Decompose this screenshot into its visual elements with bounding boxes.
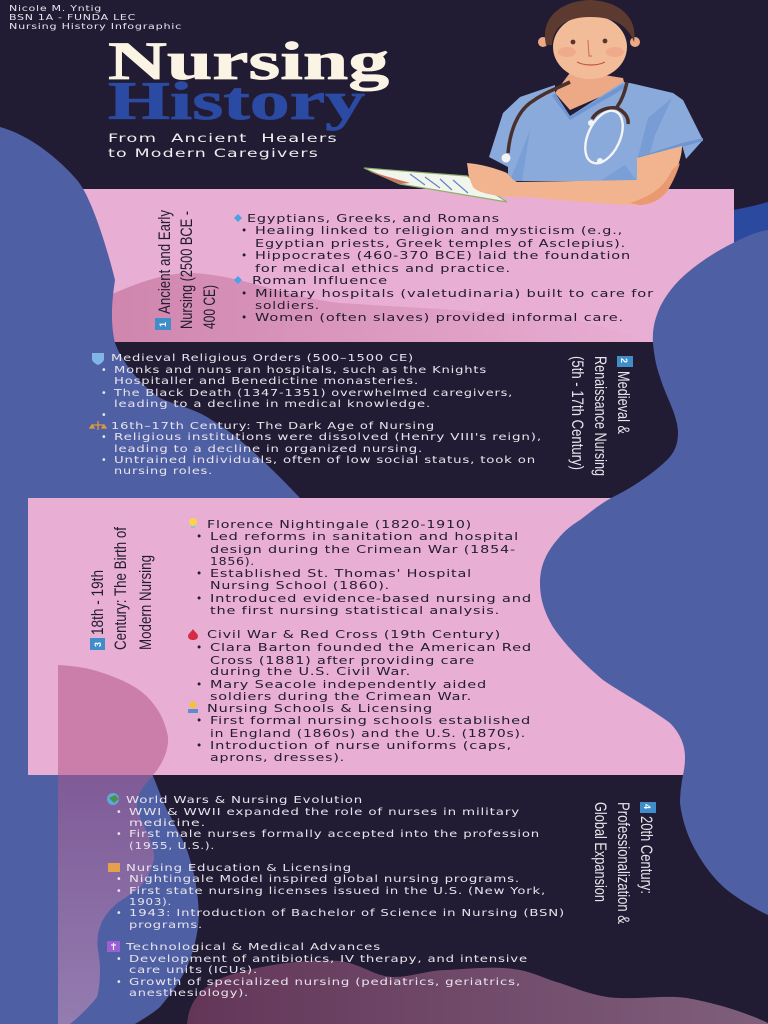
section 4 icons bbox=[107, 793, 120, 952]
section 2 text: Hospitaller and Benedictine monasteries. bbox=[114, 376, 419, 387]
section 3 text: Nursing School (1860). bbox=[210, 580, 390, 592]
bottom maroon wave bbox=[187, 960, 768, 1024]
author credits: Nursing History Infographic bbox=[9, 22, 182, 31]
section 2 heading: Medieval & bbox=[614, 371, 632, 434]
author credits bbox=[9, 4, 182, 31]
section 2 text: • bbox=[101, 410, 107, 421]
section 3 text: Introduction of nurse uniforms (caps, bbox=[210, 740, 512, 752]
section 3 heading bbox=[89, 527, 155, 650]
section 3 heading: 18th - 19th bbox=[89, 570, 107, 635]
section 2 text: 16th–17th Century: The Dark Age of Nursing bbox=[111, 421, 435, 432]
section 4 text: • bbox=[116, 908, 122, 919]
section 4 text: Technological & Medical Advances bbox=[125, 942, 381, 953]
section 1 text: Healing linked to religion and mysticism (e.g., bbox=[255, 225, 623, 237]
section 2 text: Monks and nuns ran hospitals, such as the Knights bbox=[114, 365, 487, 376]
section 1 text: for medical ethics and practice. bbox=[255, 263, 511, 275]
author credits: BSN 1A - FUNDA LEC bbox=[9, 13, 136, 22]
left blue blob bbox=[0, 127, 300, 1024]
section 3 text: Nursing Schools & Licensing bbox=[207, 703, 433, 715]
section 2 text: • bbox=[101, 388, 107, 399]
section 4 heading: Global Expansion bbox=[591, 802, 609, 902]
panel 1 darker wave bbox=[100, 273, 652, 342]
illustration: nurse with clipboard bbox=[364, 0, 703, 205]
pink panel 1 bbox=[70, 189, 734, 342]
section 4 text: • bbox=[116, 874, 122, 885]
section 4 text: Nightingale Model inspired global nursing programs. bbox=[129, 874, 520, 885]
section 1 text: • bbox=[241, 312, 248, 324]
section 3 text: • bbox=[196, 568, 203, 580]
section 3 text: Florence Nightingale (1820-1910) bbox=[207, 519, 472, 531]
title: History bbox=[108, 71, 365, 131]
section 4 text: anesthesiology). bbox=[129, 988, 249, 999]
section 1 text: Egyptian priests, Greek temples of Asclepius). bbox=[255, 238, 626, 250]
section 1 text: Military hospitals (valetudinaria) built to care for bbox=[255, 288, 654, 300]
section 2 heading: Renaissance Nursing bbox=[591, 356, 609, 476]
section 4 text: (1955, U.S.). bbox=[129, 841, 215, 852]
section 1 text: Women (often slaves) provided informal care. bbox=[255, 312, 624, 324]
section 4 text: programs. bbox=[129, 920, 203, 931]
section 1 text: • bbox=[241, 288, 248, 300]
section 4 heading: 4 bbox=[642, 804, 652, 809]
section 4 text: Growth of specialized nursing (pediatrics, geriatrics, bbox=[129, 977, 521, 988]
section 4 text: 1903). bbox=[129, 897, 172, 908]
section 4 text bbox=[116, 795, 565, 999]
section 4 text: care units (ICUs). bbox=[129, 965, 258, 976]
subtitle bbox=[108, 131, 338, 160]
section 3 text: • bbox=[196, 679, 203, 691]
right blue blob bbox=[540, 230, 768, 915]
section 3 text: aprons, dresses). bbox=[210, 752, 345, 764]
section 2 text: • bbox=[101, 365, 107, 376]
section 3: birth of modern nursing bbox=[89, 518, 532, 764]
section 3 text: the first nursing statistical analysis. bbox=[210, 605, 500, 617]
section 3 text: • bbox=[196, 593, 203, 605]
section 2 text: nursing roles. bbox=[114, 466, 213, 477]
section 3 text: • bbox=[196, 740, 203, 752]
section 2 text: leading to a decline in organized nursing. bbox=[114, 444, 423, 455]
pink panel 3 bbox=[28, 498, 685, 775]
section 1 heading: Nursing (2500 BCE - bbox=[178, 211, 196, 329]
purple blob lower left bbox=[58, 770, 154, 1024]
section 2 text: Religious institutions were dissolved (Henry VIII's reign), bbox=[114, 432, 542, 443]
section 1 heading: Ancient and Early bbox=[156, 209, 174, 314]
title bbox=[108, 31, 389, 131]
panel 3 darker circle bbox=[58, 665, 168, 775]
section 3 text: Clara Barton founded the American Red bbox=[210, 642, 532, 654]
section 4 text: 1943: Introduction of Bachelor of Science in Nursing (BSN) bbox=[129, 908, 565, 919]
section 3 heading: 3 bbox=[93, 642, 103, 647]
section 2 text: Untrained individuals, often of low social status, took on bbox=[114, 455, 536, 466]
section 4: professionalization bbox=[107, 793, 656, 999]
section 4 text: • bbox=[116, 977, 122, 988]
section 4 heading bbox=[591, 802, 656, 924]
section 3 text: design during the Crimean War (1854- bbox=[210, 544, 516, 556]
section 1 text: • bbox=[241, 225, 248, 237]
section 4 text: First state nursing licenses issued in the U.S. (New York, bbox=[129, 886, 546, 897]
section 1 heading: 1 bbox=[158, 322, 168, 327]
subtitle: to Modern Caregivers bbox=[108, 146, 319, 160]
section 3 text: Mary Seacole independently aided bbox=[210, 679, 487, 691]
section 3 text: Led reforms in sanitation and hospital bbox=[210, 531, 519, 543]
section 4 text: • bbox=[116, 886, 122, 897]
section 2 heading bbox=[568, 356, 633, 476]
section 4 text: First male nurses formally accepted into the profession bbox=[129, 829, 540, 840]
section 4 heading: 20th Century: bbox=[637, 816, 655, 894]
section 3 text: soldiers during the Crimean War. bbox=[210, 691, 472, 703]
section 3 icons bbox=[188, 518, 198, 713]
section 2: medieval nursing bbox=[90, 353, 633, 477]
section 3 text: Established St. Thomas' Hospital bbox=[210, 568, 472, 580]
section 1 icons bbox=[234, 214, 242, 284]
section 4 heading: Professionalization & bbox=[614, 802, 632, 924]
section 3 text: • bbox=[196, 715, 203, 727]
title: Nursing bbox=[108, 31, 389, 91]
section 4 text: WWI & WWII expanded the role of nurses in military bbox=[129, 807, 520, 818]
section 1 text: soldiers. bbox=[255, 300, 320, 312]
section 3 text: • bbox=[196, 531, 203, 543]
section 1: ancient nursing bbox=[155, 209, 654, 330]
section 1 text: Hippocrates (460-370 BCE) laid the foundation bbox=[255, 250, 631, 262]
section 4 text: • bbox=[116, 829, 122, 840]
section 2 text: • bbox=[101, 432, 107, 443]
section 1 text: Roman Influence bbox=[252, 275, 388, 287]
section 3 text bbox=[196, 519, 532, 764]
section 4 text: medicine. bbox=[129, 818, 206, 829]
section 2 heading: 2 bbox=[619, 358, 629, 363]
section 3 text: during the U.S. Civil War. bbox=[210, 666, 411, 678]
section 4 text: Development of antibiotics, IV therapy, and intensive bbox=[129, 954, 528, 965]
section 3 text: Introduced evidence-based nursing and bbox=[210, 593, 532, 605]
section 3 heading: Century: The Birth of bbox=[112, 527, 130, 650]
section 4 text: • bbox=[116, 954, 122, 965]
section 1 text: Egyptians, Greeks, and Romans bbox=[247, 213, 500, 225]
section 2 heading: (5th - 17th Century) bbox=[568, 356, 586, 470]
subtitle: From Ancient Healers bbox=[108, 131, 338, 145]
section 2 text bbox=[101, 353, 542, 477]
section 4 text: World Wars & Nursing Evolution bbox=[126, 795, 363, 806]
section 2 text: • bbox=[101, 455, 107, 466]
section 3 heading: Modern Nursing bbox=[137, 555, 155, 650]
section 3 text: in England (1860s) and the U.S. (1870s). bbox=[210, 728, 526, 740]
section 3 text: 1856). bbox=[210, 556, 255, 568]
section 2 text: Medieval Religious Orders (500–1500 CE) bbox=[111, 353, 414, 364]
section 4 text: Nursing Education & Licensing bbox=[126, 863, 352, 874]
section 3 text: Cross (1881) after providing care bbox=[210, 655, 475, 667]
section 3 text: First formal nursing schools established bbox=[210, 715, 531, 727]
dark blue corner bbox=[733, 202, 768, 250]
section 4 text: • bbox=[116, 807, 122, 818]
section 2 icons bbox=[90, 353, 106, 430]
section 2 text: leading to a decline in medical knowledge. bbox=[114, 399, 431, 410]
author credits: Nicole M. Yntig bbox=[9, 4, 102, 13]
section 3 text: Civil War & Red Cross (19th Century) bbox=[207, 629, 501, 641]
section 1 heading: 400 CE) bbox=[201, 285, 219, 329]
section 2 text: The Black Death (1347-1351) overwhelmed caregivers, bbox=[113, 388, 513, 399]
section 3 text: • bbox=[196, 642, 203, 654]
section 1 heading bbox=[155, 209, 219, 330]
section 1 text: • bbox=[241, 250, 248, 262]
section 1 text bbox=[241, 213, 654, 324]
